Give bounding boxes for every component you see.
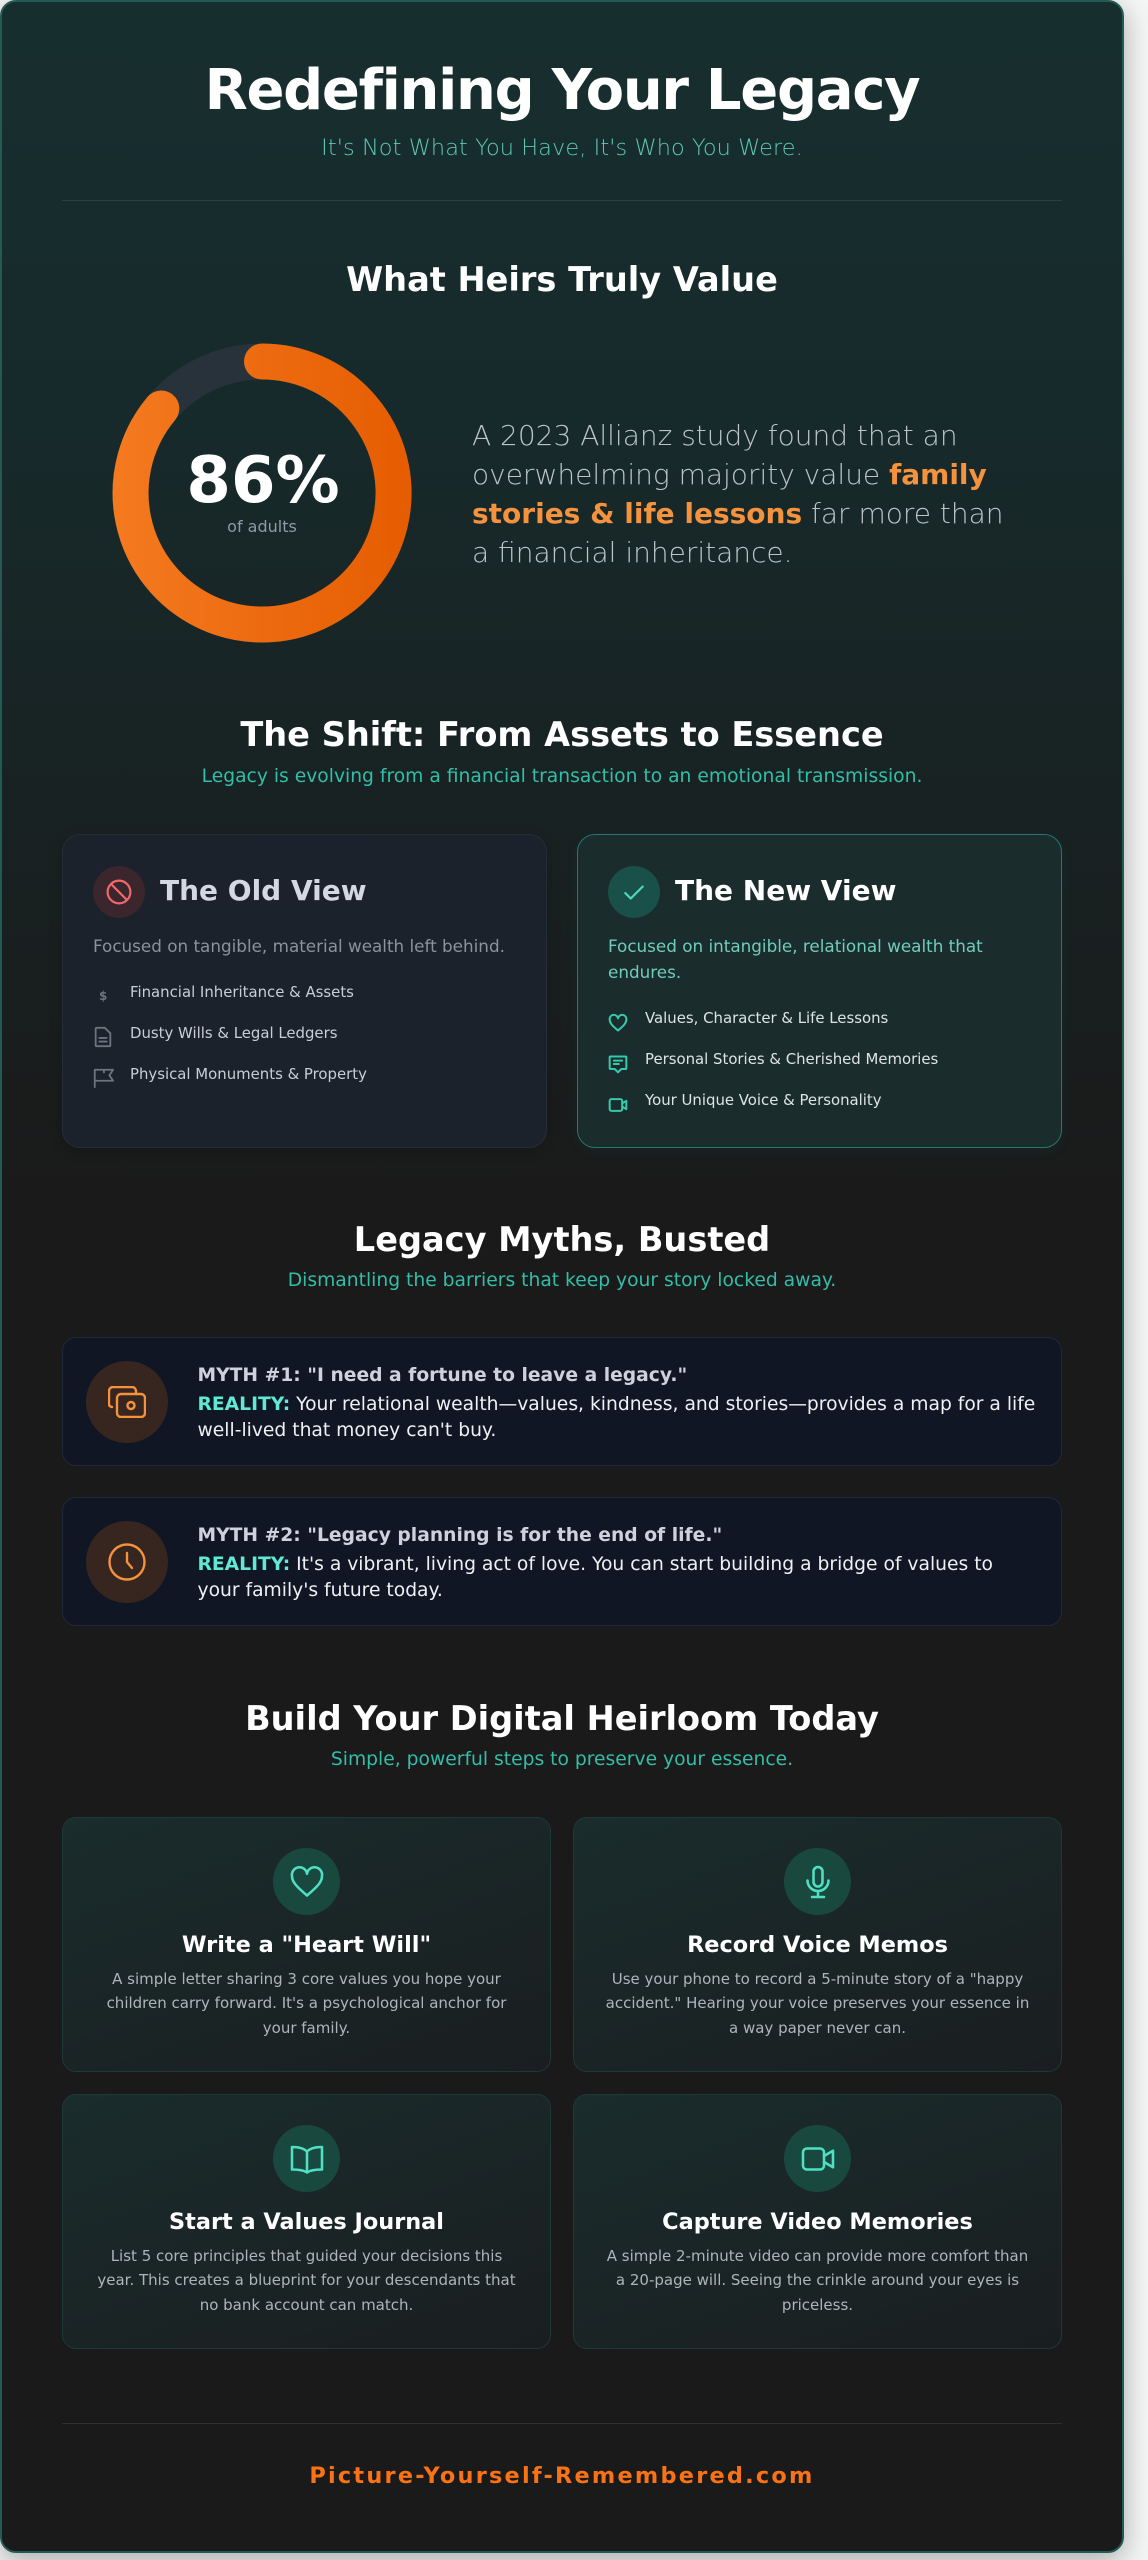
reality statement (198, 1394, 1035, 1441)
donut chart: 86 percent (112, 344, 412, 642)
reality statement: REALITY: It's a vibrant, living act of love. You can start building a bridge of values to (198, 1554, 993, 1575)
icon: clock (86, 1521, 168, 1603)
card description (606, 2247, 1028, 2314)
myth 2 (62, 1497, 1062, 1626)
card description (97, 2247, 516, 2314)
heading: what heirs value: What Heirs Truly Value (346, 260, 778, 299)
myths subtitle: Dismantling the barriers that keep your story locked away. (288, 1270, 836, 1291)
card description: no bank account can match. (200, 2296, 413, 2314)
item: dusty wills (94, 1024, 337, 1048)
myth 2 text (198, 1525, 993, 1601)
label: Values, Character & Life Lessons (645, 1009, 888, 1027)
icon: microphone (784, 1848, 851, 1915)
old view description: Focused on tangible, material wealth left behind. (93, 936, 505, 956)
label: Personal Stories & Cherished Memories (645, 1050, 938, 1068)
card description: priceless. (782, 2296, 853, 2314)
new view description: endures. (608, 962, 681, 982)
icon: video (608, 1098, 628, 1112)
heading: digital heirloom: Build Your Digital Heirloom Today (245, 1699, 879, 1738)
item: physical monuments (94, 1065, 367, 1088)
card: values journal (62, 2094, 551, 2349)
reality statement: well-lived that money can't buy. (198, 1420, 496, 1441)
item: voice (608, 1091, 882, 1112)
card description (107, 1970, 506, 2037)
panel: new view (577, 834, 1062, 1148)
card description: accident." Hearing your voice preserves your essence in (606, 1994, 1029, 2012)
card title: Start a Values Journal (169, 2209, 444, 2235)
icon: chat (608, 1056, 628, 1074)
card description: children carry forward. It's a psychological anchor for (107, 1994, 506, 2012)
myth 1 (62, 1337, 1062, 1466)
label: Dusty Wills & Legal Ledgers (130, 1024, 337, 1042)
card description: a way paper never can. (729, 2019, 906, 2037)
new view heading: The New View (675, 874, 896, 907)
label: Physical Monuments & Property (130, 1065, 367, 1083)
icon: document (94, 1026, 112, 1048)
footer site name: Picture-Yourself-Remembered.com (309, 2463, 815, 2489)
reality statement (198, 1554, 993, 1601)
study text: a financial inheritance. (472, 536, 793, 569)
card: voice memos (573, 1817, 1062, 2072)
card description (606, 1970, 1029, 2037)
card description: List 5 core principles that guided your decisions this (111, 2247, 502, 2265)
heading: the shift: The Shift: From Assets to Essence (240, 715, 884, 754)
icon: video (784, 2125, 851, 2192)
old view heading: The Old View (160, 874, 367, 907)
icon: heart (608, 1014, 628, 1032)
study text: A 2023 Allianz study found that an (472, 419, 958, 452)
card title: Record Voice Memos (687, 1932, 948, 1958)
card title: Capture Video Memories (662, 2209, 973, 2235)
card description: Use your phone to record a 5-minute story of a "happy (612, 1970, 1023, 1988)
label: Your Unique Voice & Personality (645, 1091, 882, 1109)
study text: stories & life lessons far more than (472, 497, 1004, 530)
icon: dollar: $ (99, 989, 107, 1003)
icon: flag (94, 1068, 114, 1088)
item: values (608, 1009, 888, 1032)
icon: check (608, 866, 660, 918)
card title: Write a "Heart Will" (182, 1932, 431, 1958)
shift subtitle: Legacy is evolving from a financial transaction to an emotional transmission. (202, 766, 922, 787)
heading: myths: Legacy Myths, Busted (354, 1220, 770, 1259)
stat caption: of adults (227, 517, 297, 536)
myth 1 text (198, 1365, 1035, 1441)
myth statement: MYTH #2: "Legacy planning is for the end of life." (198, 1525, 722, 1546)
study text (472, 419, 1004, 569)
item: financial inheritance (99, 983, 354, 1003)
heirloom subtitle: Simple, powerful steps to preserve your essence. (331, 1749, 793, 1770)
myth statement: MYTH #1: "I need a fortune to leave a legacy." (198, 1365, 687, 1386)
new view description (608, 936, 983, 982)
item: stories (608, 1050, 938, 1074)
reality statement: REALITY: Your relational wealth—values, kindness, and stories—provides a map for a life (198, 1394, 1035, 1415)
card description: A simple letter sharing 3 core values you hope your (112, 1970, 501, 1988)
icon: heart (273, 1848, 340, 1915)
card: heart will (62, 1817, 551, 2072)
card description: your family. (263, 2019, 350, 2037)
new view description: Focused on intangible, relational wealth that (608, 936, 983, 956)
card description: A simple 2-minute video can provide more comfort than (607, 2247, 1028, 2265)
title: Redefining Your Legacy (205, 58, 919, 123)
study text: overwhelming majority value family (472, 458, 987, 491)
subtitle: It's Not What You Have, It's Who You Were. (321, 135, 803, 161)
icon: cash (86, 1361, 168, 1443)
card: video memories (573, 2094, 1062, 2349)
card description: year. This creates a blueprint for your descendants that (97, 2271, 516, 2289)
reality statement: your family's future today. (198, 1580, 443, 1601)
panel: old view (62, 834, 547, 1148)
card description: a 20-page will. Seeing the crinkle around your eyes is (616, 2271, 1019, 2289)
icon: ban (93, 866, 145, 918)
label: Financial Inheritance & Assets (130, 983, 354, 1001)
icon: book (273, 2125, 340, 2192)
stat value: 86% (186, 444, 340, 518)
